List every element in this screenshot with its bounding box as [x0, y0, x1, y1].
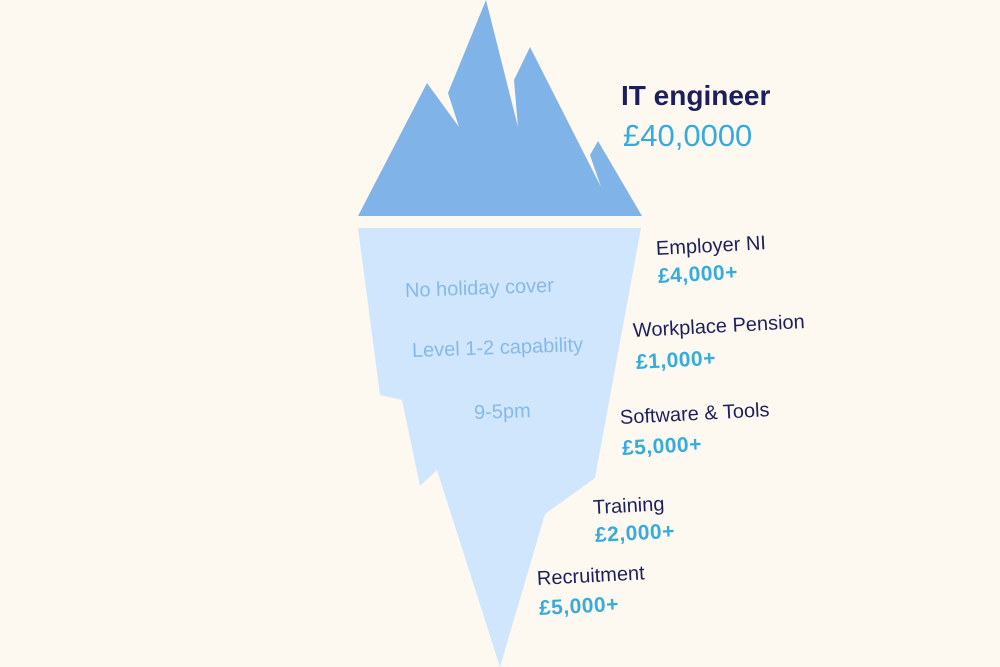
salary: £40,0000 — [623, 118, 752, 153]
amount: software: £5,000+ — [621, 433, 702, 460]
amount: NI: £4,000+ — [657, 261, 738, 288]
iceberg underwater — [358, 228, 641, 667]
amount: pension: £1,000+ — [635, 347, 716, 374]
inner text: no holiday cover: No holiday cover — [405, 275, 554, 302]
label: Recruitment: Recruitment — [536, 562, 645, 590]
inner text: hours: 9-5pm — [474, 400, 531, 424]
amount: recruitment: £5,000+ — [538, 593, 619, 620]
inner text: level capability: Level 1-2 capability — [412, 334, 583, 362]
iceberg top — [358, 0, 642, 216]
amount: training: £2,000+ — [594, 520, 675, 547]
title: IT engineer: IT engineer — [621, 80, 770, 111]
label: Training: Training — [592, 493, 665, 519]
label: Employer NI: Employer NI — [655, 232, 766, 260]
label: Software & Tools: Software & Tools — [619, 399, 770, 429]
label: Workplace Pension: Workplace Pension — [632, 311, 805, 342]
